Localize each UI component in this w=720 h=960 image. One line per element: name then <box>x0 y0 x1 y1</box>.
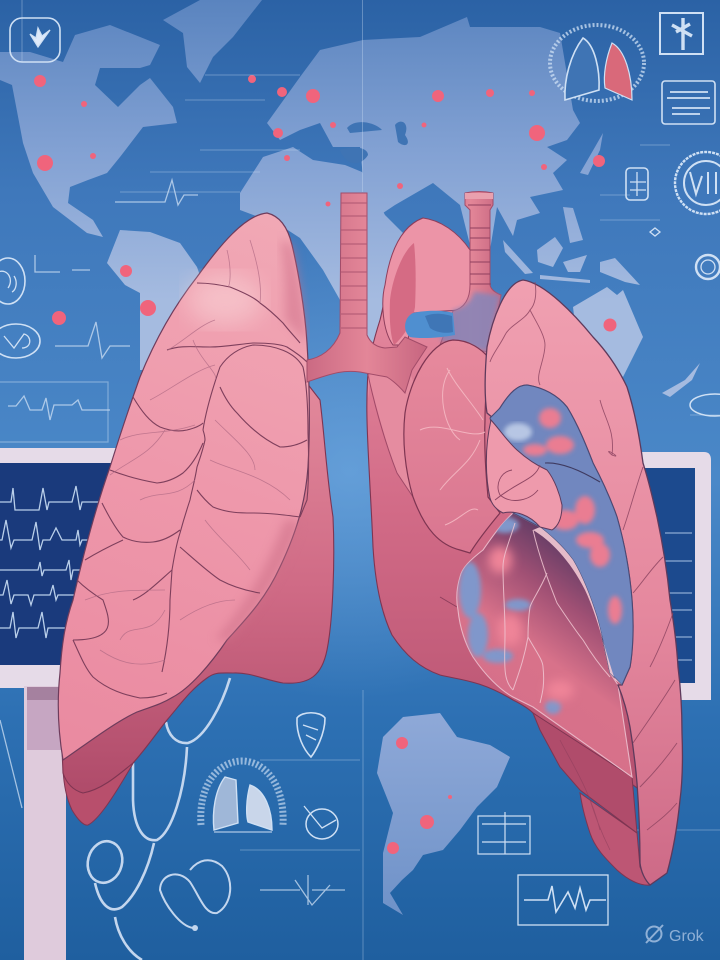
diseased blue region <box>490 385 633 685</box>
icon: framed plant top right <box>660 13 703 54</box>
back lobe fissure <box>440 597 457 607</box>
blue bronchus <box>405 311 455 338</box>
lower right lobe <box>457 513 632 777</box>
icon: small diamond <box>650 228 660 236</box>
blue patches of lower lobe <box>459 517 574 714</box>
right lung <box>367 218 640 790</box>
right lung back lobe <box>367 218 640 790</box>
monitor frame right <box>640 452 711 700</box>
map: North America <box>0 25 177 237</box>
map: South America lower <box>377 713 510 915</box>
lobe fissures <box>73 283 309 698</box>
chart: table bottom <box>478 812 530 854</box>
icon: lungs diagram top right <box>550 25 644 101</box>
map: South East Asia islands <box>503 133 640 285</box>
icon: lungs diagram bottom <box>201 761 283 832</box>
icon: circular organ <box>304 806 338 839</box>
right lung upper inner lobe <box>383 218 472 345</box>
chart: ecg traces in background <box>0 180 345 905</box>
trachea right tube <box>440 192 501 352</box>
band lines right <box>560 740 610 850</box>
highlight on upper lobe <box>187 274 263 326</box>
icon: small tablet <box>626 168 648 200</box>
icon: pendant <box>297 713 325 757</box>
left lung lowest lobe <box>63 760 135 825</box>
chart: ecg on left monitor <box>0 486 105 638</box>
purple bronchus fade <box>440 292 500 352</box>
watermark: Grok: Grok <box>669 928 705 945</box>
icon: ellipse right <box>690 394 720 416</box>
icon: left stethoscope oval <box>0 324 40 358</box>
pink fold over blue region <box>486 420 562 530</box>
monitor right <box>640 452 711 700</box>
chart: graph bottom right <box>518 875 608 925</box>
blue fissure lines <box>545 463 600 482</box>
icon: badge right <box>675 152 720 214</box>
map: Africa and Arabia <box>240 147 410 345</box>
map: Australia <box>573 287 643 377</box>
right lung crescent beside heart <box>368 345 420 497</box>
monitor screen right <box>640 468 695 683</box>
trachea left tube with branch <box>307 193 427 393</box>
second band right <box>533 713 637 833</box>
map: South America upper <box>107 230 205 370</box>
lowest band right <box>580 793 650 885</box>
monitor screen left <box>0 463 120 665</box>
right lung front parts <box>404 280 682 885</box>
shading on right of lung <box>280 240 307 343</box>
lobe veins <box>490 282 677 830</box>
left lung middle band <box>60 378 334 793</box>
monitor stand <box>24 686 66 960</box>
icon: shield top left <box>10 18 60 62</box>
icon: rings right <box>696 255 720 279</box>
monitor left <box>0 448 120 960</box>
map: Greenland <box>163 0 262 83</box>
heart-shaped middle lobe <box>404 340 500 553</box>
map: Europe and Asia <box>267 17 580 250</box>
right lung opening <box>390 243 416 345</box>
chart: box around ecg <box>0 382 108 442</box>
map markers <box>34 75 616 854</box>
trachea <box>307 192 501 393</box>
monitor frame left <box>0 448 120 688</box>
stethoscope <box>83 678 230 960</box>
left lung front lobe <box>58 213 309 760</box>
watermark: Grok <box>646 925 705 945</box>
map: water inland <box>340 122 408 163</box>
icon: text card <box>662 81 715 124</box>
left lung <box>58 213 334 825</box>
icon: left oval <box>0 258 25 304</box>
map: New Zealand <box>662 363 700 397</box>
right lung outer big lobe <box>485 280 682 885</box>
